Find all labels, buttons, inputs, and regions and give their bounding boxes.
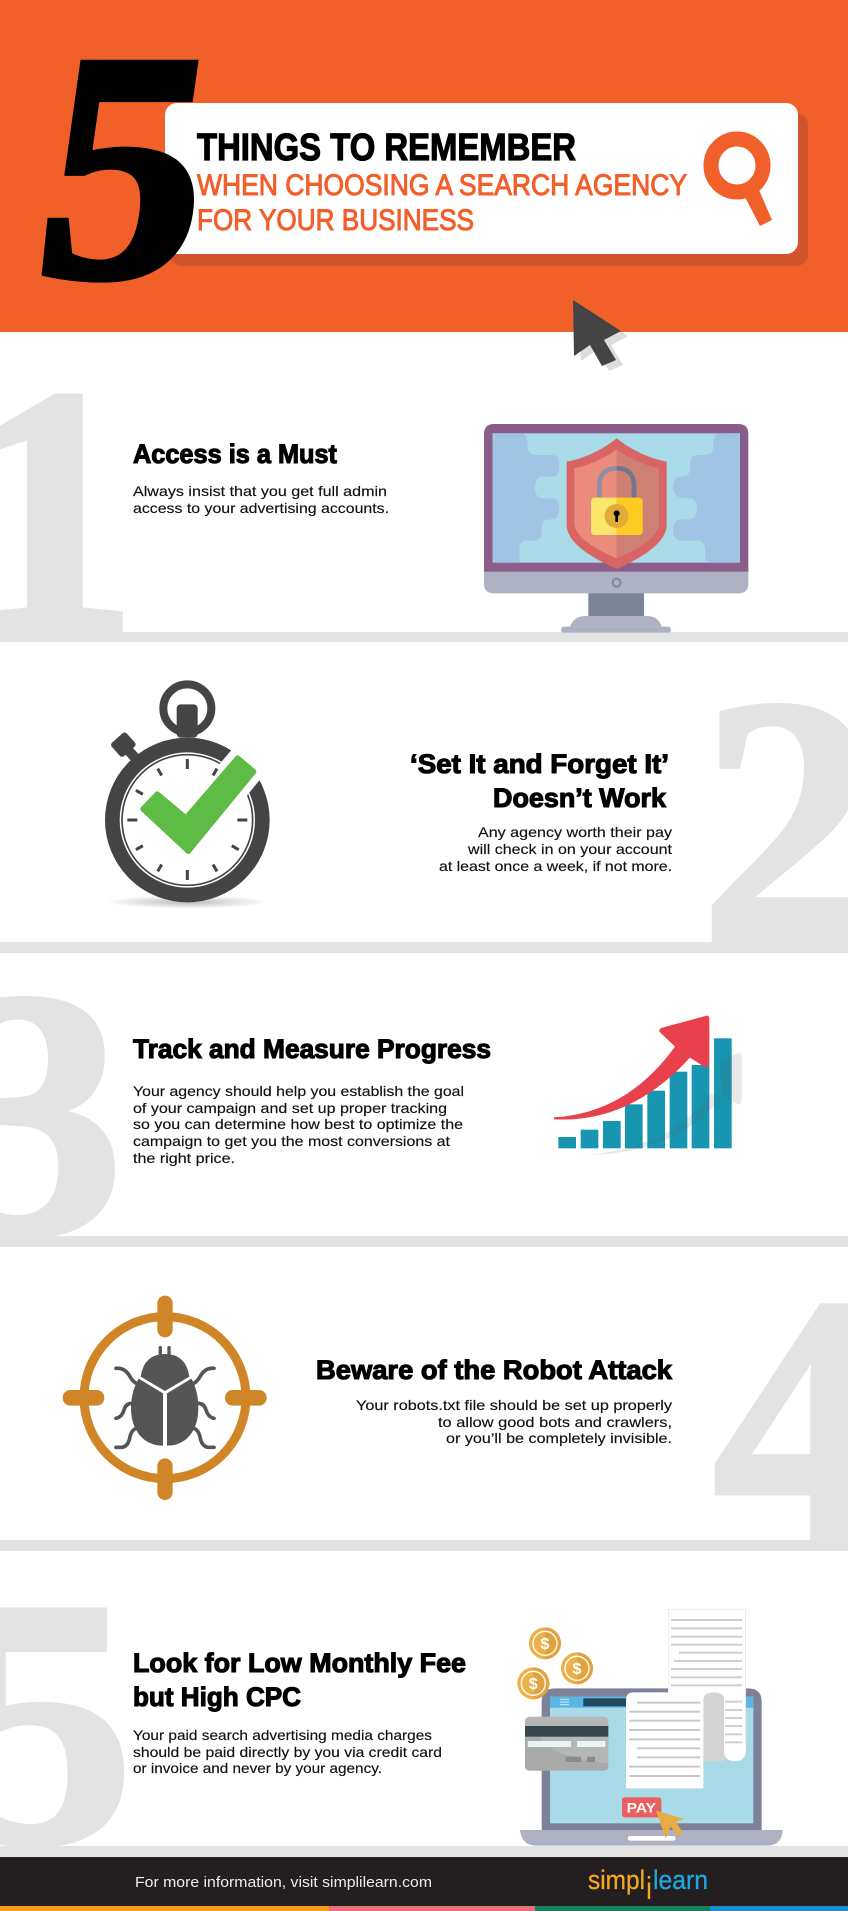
- body text: [356, 1397, 672, 1446]
- icon: monitor with shield and lock: [484, 424, 748, 633]
- panel: section 2: [0, 626, 848, 1016]
- icon: laptop payment with invoice, card and coins: PAY: [627, 1799, 657, 1815]
- body text: [133, 1727, 442, 1776]
- heading: Track and Measure Progress: [133, 1034, 491, 1064]
- body text: access to your advertising accounts.: [133, 500, 389, 516]
- heading: Access is a Must: [133, 439, 337, 469]
- body text: [133, 1083, 464, 1166]
- heading: Doesn’t Work: [493, 783, 666, 813]
- heading: but High CPC: [133, 1682, 301, 1712]
- body text: Your paid search advertising media charges: [133, 1727, 432, 1743]
- icon: laptop payment with invoice, card and coins: $: [573, 1661, 582, 1678]
- body text: [439, 824, 672, 874]
- logo: simplilearn: simpl: [588, 1865, 645, 1895]
- logo: simplilearn: [588, 1865, 708, 1906]
- panel: header: [0, 0, 848, 347]
- body text: at least once a week, if not more.: [439, 858, 672, 874]
- bar chart with rising arrow: [554, 1016, 742, 1155]
- icon: bug in crosshair: [63, 1296, 267, 1500]
- heading: [133, 1648, 466, 1712]
- search bar: [165, 103, 798, 254]
- heading: Beware of the Robot Attack: [316, 1355, 672, 1385]
- body text: [133, 483, 389, 516]
- divider band: [0, 632, 848, 642]
- colour strip: [0, 1906, 848, 1911]
- footer text: For more information, visit simplilearn.com: [135, 1875, 432, 1891]
- body text: Any agency worth their pay: [478, 824, 672, 840]
- cursor shadow: [580, 305, 628, 371]
- body text: Your agency should help you establish the goal: [133, 1083, 464, 1099]
- body text: the right price.: [133, 1150, 235, 1166]
- icon: laptop payment with invoice, card and coins: $: [529, 1676, 538, 1693]
- divider band: [0, 1540, 848, 1551]
- divider band: [0, 942, 848, 953]
- body text: will check in on your account: [467, 841, 672, 857]
- icon: laptop payment with invoice, card and coins: $: [541, 1636, 550, 1653]
- body text: to allow good bots and crawlers,: [438, 1414, 672, 1430]
- divider band: [0, 1846, 848, 1857]
- body text: Your robots.txt file should be set up properly: [356, 1397, 672, 1413]
- body text: campaign to get you the most conversions at: [133, 1133, 450, 1149]
- logo: simplilearn: i: [646, 1872, 652, 1906]
- body text: of your campaign and set up proper tracking: [133, 1100, 447, 1116]
- search bar shadow: [170, 113, 808, 266]
- title: WHEN CHOOSING A SEARCH AGENCY: [197, 169, 687, 202]
- heading: ‘Set It and Forget It’: [410, 749, 669, 779]
- logo: simplilearn: learn: [653, 1865, 708, 1895]
- body text: so you can determine how best to optimize the: [133, 1116, 463, 1132]
- heading: Look for Low Monthly Fee: [133, 1648, 466, 1678]
- title: THINGS TO REMEMBER: [197, 127, 576, 169]
- heading: [410, 749, 669, 813]
- divider band: [0, 1236, 848, 1247]
- panel: section 3: [0, 919, 848, 1309]
- title: [197, 127, 687, 237]
- panel: section 1: [0, 316, 848, 706]
- panel: footer: [0, 1857, 848, 1911]
- body text: should be paid directly by you via credit card: [133, 1744, 442, 1760]
- icon: magnifying glass: [711, 139, 772, 226]
- icon: laptop payment with invoice, card and coins: [517, 1609, 783, 1846]
- panel: section 5: [0, 1528, 848, 1911]
- icon: stopwatch with check mark: [106, 684, 269, 909]
- icon: mouse cursor: [573, 300, 621, 366]
- body text: or you’ll be completely invisible.: [446, 1430, 672, 1446]
- title: FOR YOUR BUSINESS: [197, 204, 474, 237]
- panel: section 4: [0, 1225, 848, 1615]
- body text: or invoice and never by your agency.: [133, 1760, 382, 1776]
- body text: Always insist that you get full admin: [133, 483, 387, 499]
